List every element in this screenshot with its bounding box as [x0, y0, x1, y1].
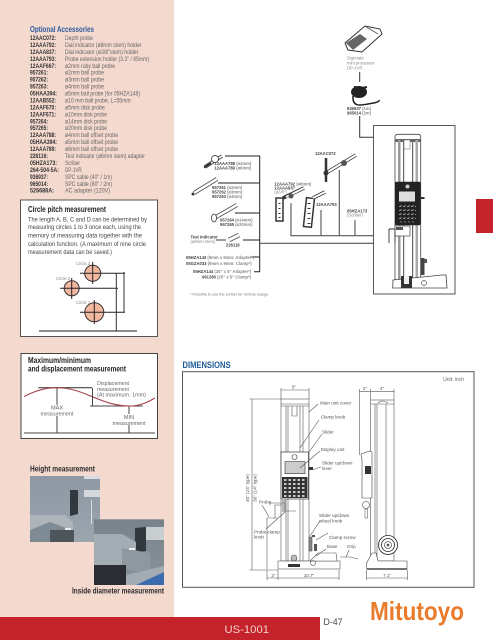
- part labels: wheel knob: [319, 518, 343, 524]
- dimension values: 30" (14" type): [252, 474, 258, 502]
- accessories list: 526688A:: [30, 188, 54, 195]
- label: dial indicator holders: (ø3/8"): [274, 190, 288, 194]
- accessories list: Probe extension holder (3.3" / 85mm): [65, 56, 149, 63]
- icon: disk probes: [212, 205, 237, 222]
- part labels: Probe clamp: [254, 530, 280, 534]
- dimension values: 40" (24" type): [245, 474, 250, 502]
- icon: dial indicator holder: [276, 188, 304, 221]
- icon: printer: [345, 26, 382, 52]
- dimension values: 7.1": [383, 573, 391, 578]
- accessories list: 12AAA792:: [30, 42, 56, 49]
- accessories list: ø2mm ball probe: [65, 70, 104, 77]
- accessories list: ø3mm ball probe: [65, 77, 104, 84]
- side view drawing: [360, 389, 407, 580]
- accessories list: ø5mm ball offset probe: [65, 139, 118, 146]
- label: test indicator: Test indicator: [190, 234, 218, 240]
- accessories list: [30, 35, 149, 195]
- part labels: Base: [327, 544, 338, 549]
- label: test indicator: [190, 234, 240, 248]
- accessories list: ø2mm ruby ball probe: [65, 63, 115, 70]
- label: printer: Digimatic: [347, 56, 364, 60]
- accessories list: Test indicator (ø6mm stem) adapter: [65, 153, 145, 160]
- slider and probe holder: [389, 226, 410, 243]
- label: adapters and clamps: 05HZA144 (25" x 5" Adapter*): [193, 269, 252, 274]
- label: SPC cables: 936937 (1m): [347, 106, 372, 111]
- accessories list: AC adapter (120V): [65, 188, 110, 195]
- label: ball probes: 957261 (ø2mm): [212, 185, 243, 190]
- accessories list: 12AAA793:: [30, 56, 56, 63]
- circle pitch description: measurement data can be saved.): [28, 249, 112, 256]
- footnote: * Possible to use the scriber for Vehicle Gauge: [190, 292, 268, 296]
- accessories list: 957263:: [30, 84, 48, 91]
- accessories list: ø4mm ball probe: [65, 84, 104, 91]
- accessories list: 12AAF667:: [30, 63, 56, 70]
- label: printer: mini processor: [347, 60, 375, 66]
- accessory diagram: [186, 26, 455, 296]
- label: SPC cables: 965014 (2m): [347, 110, 372, 116]
- label: ball probes: [212, 185, 243, 199]
- accessories list: 12AAF671:: [30, 111, 56, 118]
- wave chart: measurement: [112, 421, 146, 427]
- part labels: Slider up/down: [319, 513, 350, 518]
- part labels: [254, 400, 356, 549]
- icon: depth probe: [324, 155, 356, 182]
- circle pitch diagram: Circle 2: [56, 276, 71, 281]
- connector lines: [218, 72, 395, 272]
- accessories list: 12AAF670:: [30, 104, 56, 111]
- accessories list: 12AAA789:: [30, 146, 56, 153]
- wave chart: measurement: [97, 387, 129, 393]
- accessories list: Dial indicator (ø3/8"stem) holder: [65, 49, 138, 56]
- max/min heading: [28, 356, 126, 374]
- accessories list: ø10mm disk probe: [65, 111, 107, 118]
- icon: ball probes: [192, 179, 217, 196]
- icon: SPC cable: [351, 86, 379, 105]
- accessories list: 12AAB552:: [30, 98, 56, 104]
- dimension values: 5": [292, 384, 296, 390]
- circle pitch diagram: Circle 3: [76, 261, 91, 266]
- wave chart: MIN: [124, 415, 134, 421]
- red footer bar: [0, 617, 320, 640]
- accessories list: 936937:: [30, 174, 48, 181]
- label: scriber: [347, 208, 368, 218]
- circle pitch description: The length A, B, C and D can be determined by: [28, 216, 148, 224]
- circle pitch description: calculation function. (A maximum of nine circle: [28, 241, 146, 248]
- wave chart: [24, 381, 155, 433]
- dimension values: 4": [380, 386, 384, 391]
- label: ball probes: 957262 (ø3mm): [212, 190, 243, 194]
- label: offset probes: 12AAA789 (ø6mm): [214, 166, 252, 170]
- icon: offset probes: [204, 156, 222, 168]
- heading: dimensions: DIMENSIONS: [182, 360, 230, 370]
- panel: dimensions: [182, 372, 474, 587]
- label: disk probes: 957265 (ø20mm): [220, 222, 253, 227]
- pink side column: [0, 0, 174, 617]
- part labels: Display unit: [321, 447, 345, 452]
- accessories list: 226116:: [30, 153, 48, 160]
- accessories list: ø20mm disk probe: [65, 125, 107, 132]
- accessories list: 05HAA394:: [30, 90, 57, 98]
- panel: circle pitch measurement: [20, 200, 158, 336]
- accessories list: 12AAA837:: [30, 49, 56, 56]
- accessories list: 965014:: [30, 181, 48, 188]
- panel: maximum/minimum and displacement measurement: [21, 354, 158, 438]
- accessories list: ø4mm ball offset probe: [65, 132, 118, 139]
- red tab on right edge: [476, 199, 493, 233]
- logo: Mitutoyo: Mitutoyo: [370, 596, 464, 626]
- part labels: lever: [322, 466, 332, 471]
- circle pitch description: [28, 216, 148, 256]
- accessories list: ø5mm disk probe: [65, 104, 105, 111]
- panel: height gauge illustration: [374, 126, 455, 294]
- heading: optional accessories: Optional Accessories: [30, 24, 94, 34]
- part labels: Main unit cover: [320, 400, 352, 406]
- icon: probe extension holder: [303, 192, 325, 227]
- label: disk probes: 957264 (ø14mm): [220, 218, 253, 222]
- heading: height measurement: Height measurement: [30, 464, 95, 474]
- wave chart: measurement: [40, 412, 74, 418]
- accessories list: SPC cable (80" / 2m): [65, 181, 112, 188]
- label: disk probes: [220, 218, 253, 227]
- accessories list: ø14mm disk probe: [65, 118, 107, 125]
- label: test indicator: (ø6mm stem): [190, 239, 216, 244]
- label: dial indicator holders: [274, 182, 312, 194]
- max/min heading: and displacement measurement: [28, 364, 126, 374]
- document code: US-1001: [224, 624, 269, 636]
- accessories list: ø5mm ball probe (for 05HZA148): [65, 90, 140, 98]
- accessories list: 12AAA788:: [30, 132, 56, 139]
- label: printer: [347, 56, 375, 70]
- part labels: Grip: [347, 544, 356, 549]
- accessories list: SPC cable (40" / 1m): [65, 174, 112, 181]
- circle pitch diagram: [39, 261, 137, 331]
- dimension values: 2": [271, 573, 276, 578]
- label: adapters and clamps: 961380 (25" x 5" Clamp*): [202, 274, 252, 280]
- accessories list: 264-504-5A:: [30, 167, 59, 174]
- wave chart: (At maximum. 1mm): [97, 392, 146, 398]
- accessories list: 05HZA173:: [30, 160, 57, 167]
- label: printer: DP-1VR: [347, 66, 362, 70]
- front view drawing: [250, 388, 358, 580]
- label: dial indicator holders: 12AAA792 (ø8mm): [274, 182, 312, 186]
- part labels: Clamp knob: [321, 414, 346, 420]
- photo: height measurement: [30, 476, 100, 542]
- label: offset probes: 12AAA788 (ø4mm): [214, 161, 252, 166]
- accessories list: 05HAA394:: [30, 139, 57, 146]
- label: depth probe: 12AAC072: [315, 151, 336, 156]
- dimension values: [245, 384, 391, 578]
- accessories list: ø10 mm ball probe, L=55mm: [65, 98, 131, 104]
- accessories list: DP-1VR: [65, 167, 82, 174]
- dimension values: 2": [363, 386, 367, 391]
- part labels: Slider: [322, 430, 334, 434]
- accessories list: Scriber: [65, 160, 80, 167]
- caption: inside diameter measurement: Inside diameter measurement: [72, 586, 164, 596]
- part labels: Probe: [259, 500, 272, 504]
- dimension values: 10.7": [304, 573, 315, 578]
- accessories list: 957262:: [30, 77, 48, 84]
- page number: D-47: [324, 617, 343, 627]
- accessories list: 957265:: [30, 125, 48, 132]
- label: dial indicator holders: 12AAA837: [274, 186, 296, 190]
- accessories list: Dial indicator (ø8mm stem) holder: [65, 42, 142, 49]
- wave chart: MAX: [51, 406, 63, 412]
- label: probe extension holder: 12AAA793: [316, 202, 337, 207]
- circle pitch description: memory of measuring data together with the: [28, 232, 142, 240]
- label: offset probes: [214, 161, 252, 170]
- label: adapters and clamps: [186, 255, 255, 280]
- label: scriber: (Scriber): [347, 212, 364, 218]
- base and wheel: [393, 258, 447, 288]
- label: test indicator: 226116: [226, 242, 240, 248]
- accessories list: 12AAC072:: [30, 35, 56, 42]
- label: adapters and clamps: 05HZA143 (9mm x 9mm: Adapter*): [186, 255, 255, 260]
- label: SPC cables: [347, 106, 372, 116]
- accessories list: 957261:: [30, 70, 48, 77]
- circle pitch heading: Circle pitch measurement: [28, 205, 106, 214]
- accessories list: Depth probe: [65, 35, 93, 42]
- circle pitch diagram: Circle 1: [76, 300, 91, 305]
- part labels: Slider up/down: [322, 460, 353, 466]
- label: ball probes: 957263 (ø4mm): [212, 194, 243, 199]
- part labels: Clamp screw: [329, 535, 356, 540]
- max/min heading: Maximum/minimum: [28, 356, 91, 365]
- accessories list: 957264:: [30, 118, 48, 125]
- accessories list: ø6mm ball offset probe: [65, 146, 118, 153]
- label: adapters and clamps: 05GZA033 (9mm x 9mm: Clamp*): [186, 261, 252, 266]
- circle pitch description: measuring circles 1 to 3 once each, using the: [28, 224, 141, 231]
- display unit: [395, 182, 424, 225]
- wave chart: Displacement: [97, 381, 129, 387]
- unit note: Unit: inch: [443, 377, 464, 383]
- part labels: knob: [254, 534, 264, 540]
- label: scriber: 05HZA173: [347, 208, 368, 214]
- photo: inside diameter measurement: [94, 519, 164, 585]
